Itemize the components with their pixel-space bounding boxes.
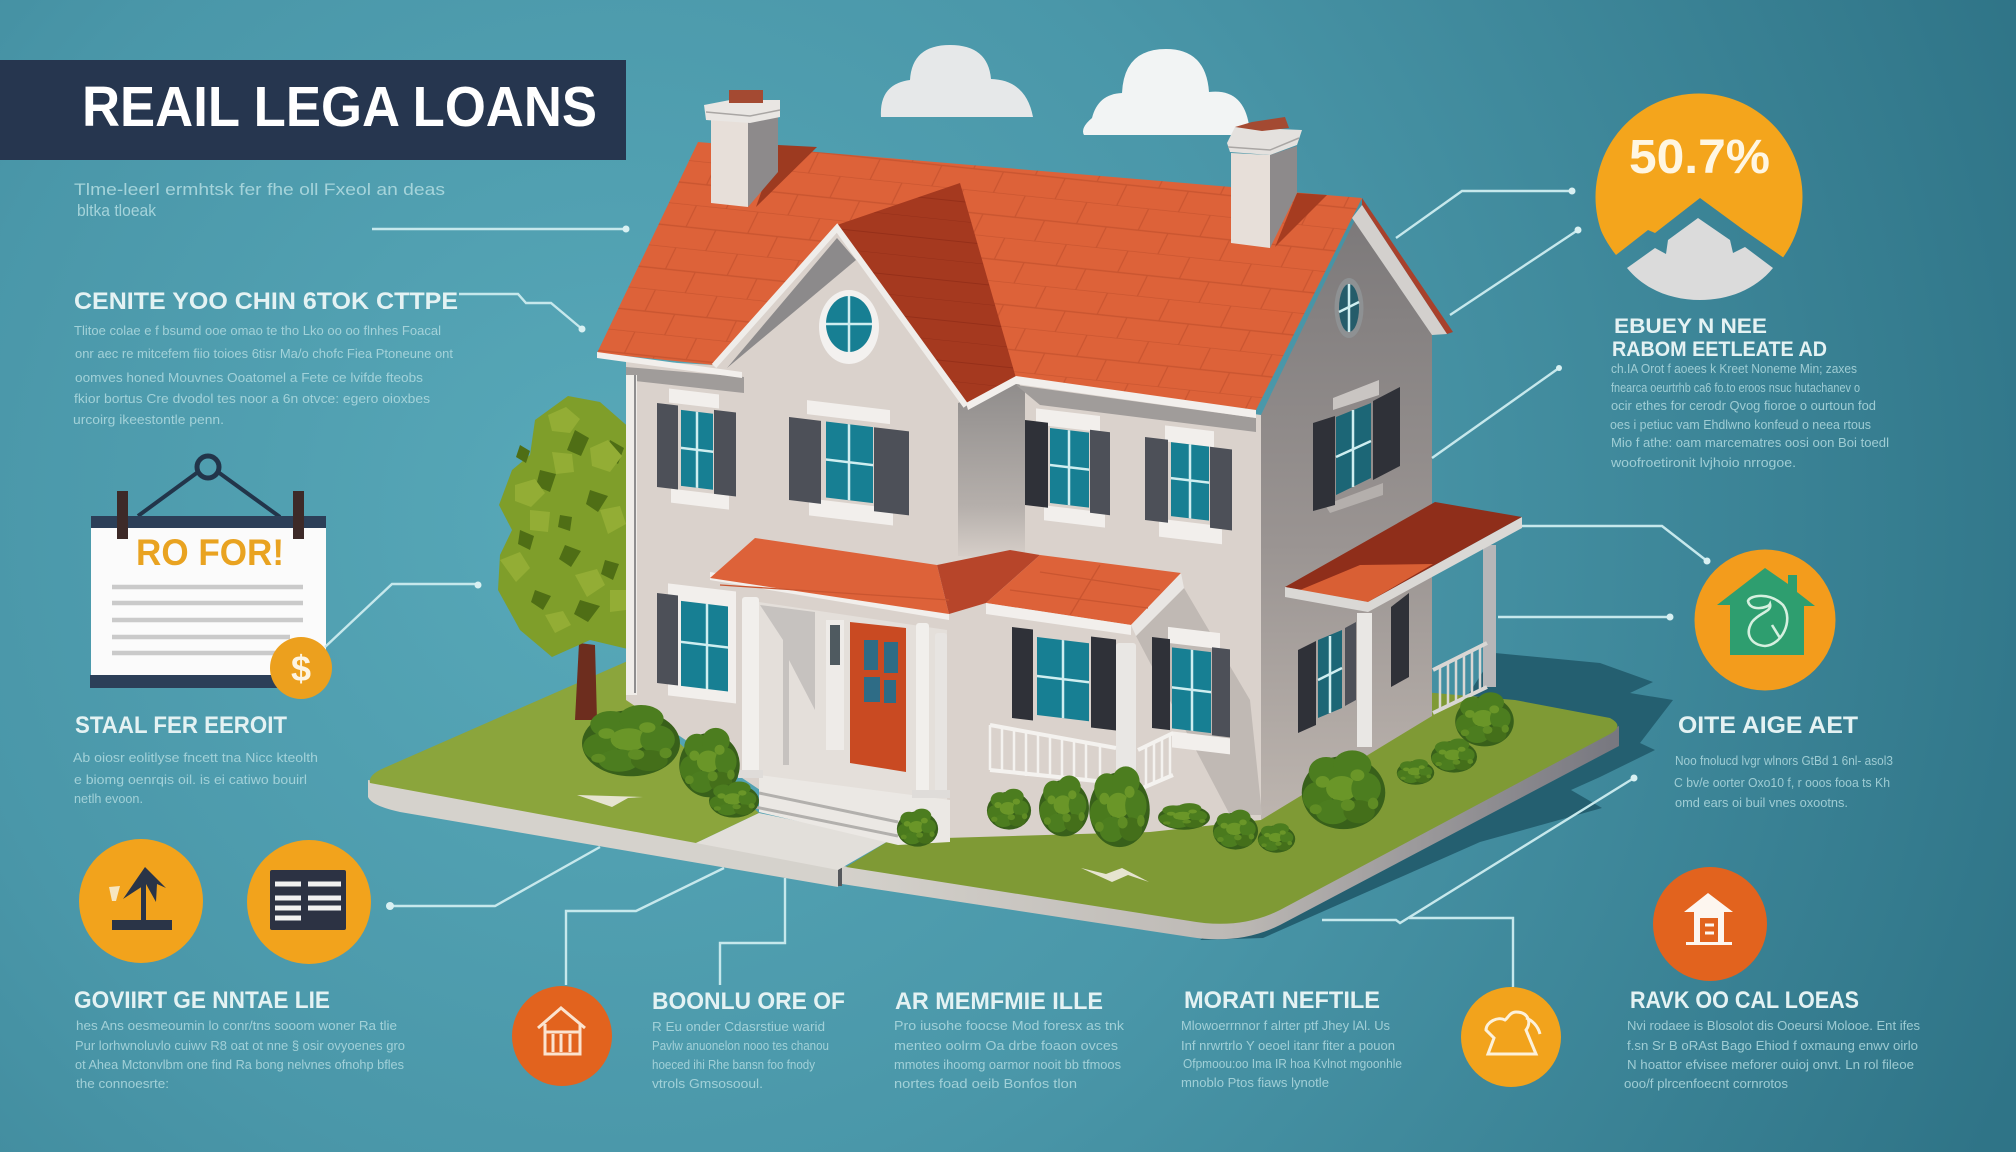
statistic badge: 50.7 percent with mountain: 50.7% <box>1629 131 1770 184</box>
chimney left <box>704 90 780 207</box>
text block: bottom section two: Pavlw anuonelon nooo tes chanou <box>652 1038 829 1053</box>
text block: bottom section four: MORATI NEFTILE <box>1184 987 1380 1014</box>
window upper 2 <box>789 398 909 527</box>
text block: bottom section four: Mlowoerrnnor f alrter ptf Jhey lAl. Us <box>1181 1018 1390 1033</box>
title banner <box>0 60 626 160</box>
text block: bottom section two <box>652 988 845 1091</box>
text block: right middle section: OITE AIGE AET <box>1678 712 1858 739</box>
porch columns <box>738 597 1136 798</box>
cloud left <box>881 45 1033 117</box>
text block: left section one <box>73 288 458 427</box>
text block: bottom section four: Ofpmoou:oo Ima IR hoa Kvlnot mgoonhle <box>1183 1056 1402 1071</box>
hanging sign illustration <box>90 456 332 699</box>
subtitle: Tlme-leerl ermhtsk fer fhe oll Fxeol an deas <box>74 180 445 199</box>
text block: bottom section two: R Eu onder Cdasrstiue warid <box>652 1019 825 1034</box>
text block: left section one: onr aec re mitcefem fiio toioes 6tisr Ma/o chofc Fiea Ptoneune ont <box>75 346 453 361</box>
window side wall upper <box>1313 380 1400 513</box>
title banner: REAIL LEGA LOANS <box>82 75 597 139</box>
text block: bottom section three: Pro iusohe foocse Mod foresx as tnk <box>894 1018 1125 1033</box>
text block: bottom section one: GOVIIRT GE NNTAE LIE <box>74 987 330 1014</box>
text block: right upper section: oes i petiuc vam Ehdlwno konfeud o neea rtous <box>1610 417 1871 432</box>
subtitle: bltka tloeak <box>77 201 156 220</box>
tree <box>498 396 632 720</box>
front railings <box>990 725 1173 790</box>
text block: bottom section three: nortes foad oeib Bonfos tlon <box>894 1076 1077 1091</box>
text block: right upper section: Mio f athe: oam marcematres oosi oon Boi toedl <box>1611 435 1889 450</box>
text block: bottom section one: ot Ahea Mctonvlbm one find Ra bong nelvnes ofnohp bfles <box>75 1057 404 1072</box>
text block: bottom section four: Inf nrwrtrlo Y oeoel itanr fiter a pouon <box>1181 1038 1395 1053</box>
text block: bottom section two: hoeced ihi Rhe bansn foo fnody <box>652 1057 815 1072</box>
text block: bottom section four: mnoblo Ptos fiaws lynotle <box>1181 1075 1329 1090</box>
text block: right upper section: ocir ethes for cerodr Qvog fioroe o ourtoun fod <box>1611 398 1876 413</box>
text block: bottom section one: Pur lorhwnoluvlo cuiwv R8 oat ot nne § osir ovyoenes gro <box>75 1038 405 1053</box>
text block: bottom section three: menteo oolrm Oa drbe foaon ovces <box>894 1038 1119 1053</box>
text block: right upper section: ch.IA Orot f aoees k Kreet Noneme Min; zaxes <box>1611 361 1857 376</box>
text block: bottom section five: f.sn Sr B oRAst Bago Ehiod f oxmaung enwv oirlo <box>1627 1038 1918 1053</box>
chimney right <box>1227 117 1302 248</box>
icon: orange circle with green house <box>1694 550 1836 690</box>
text block: left section two: netlh evoon. <box>74 791 143 806</box>
text block: bottom section five <box>1624 987 1920 1091</box>
text block: right upper section: RABOM EETLEATE AD <box>1612 338 1827 361</box>
window lower left <box>657 582 736 703</box>
window lower middle <box>1012 627 1116 730</box>
side porch <box>1285 502 1522 747</box>
subtitle <box>74 180 445 220</box>
text block: left section one: urcoirg ikeestontle penn. <box>73 412 224 427</box>
front steps <box>755 775 950 845</box>
text block: left section one: Tlitoe colae e f bsumd ooe omao te tho Lko oo oo flnhes Foacal <box>74 323 441 338</box>
callout lines <box>325 188 1710 987</box>
icon: orange circle with kettle outline <box>1461 987 1561 1087</box>
text block: bottom section three: mmotes ihoomg oarmor nooit bb tfmoos <box>894 1057 1121 1072</box>
text block: bottom section five: RAVK OO CAL LOEAS <box>1630 987 1859 1014</box>
text block: left section one: fkior bortus Cre dvodol tes noor a 6n otvce: egero oioxbes <box>74 391 431 406</box>
window upper 1 <box>657 387 736 510</box>
icon: red-orange circle with house <box>1653 867 1767 981</box>
text block: bottom section two: BOONLU ORE OF <box>652 988 845 1015</box>
text block: bottom section five: Nvi rodaee is Blosolot dis Ooeursi Molooe. Ent ifes <box>1627 1018 1920 1033</box>
text block: bottom section one: the connoesrte: <box>76 1076 169 1091</box>
cloud right <box>1083 49 1249 135</box>
text block: right upper section: fnearca oeurtrhb ca6 fo.to eroos nsuc hutachanev o <box>1611 380 1860 395</box>
text block: bottom section one <box>74 987 405 1091</box>
text block: left section two: Ab oiosr eolitlyse fncett tna Nicc kteolth <box>73 750 318 765</box>
text block: bottom section five: ooo/f plrcenfoecnt cornrotos <box>1624 1076 1789 1091</box>
text block: right middle section: omd ears oi buil vnes oxootns. <box>1675 795 1848 810</box>
text block: right middle section: C bv/e oorter Oxo10 f, r ooos fooa ts Kh <box>1674 775 1890 790</box>
porch roof <box>710 538 1184 636</box>
window upper 4 <box>1145 423 1232 545</box>
icon: orange circle with document <box>247 840 371 964</box>
house walls <box>626 205 1432 838</box>
text block: bottom section four <box>1181 987 1402 1090</box>
text block: left section one: CENITE YOO CHIN 6TOK CTTPE <box>74 288 458 315</box>
lawn platform <box>368 660 1619 939</box>
text block: right middle section <box>1674 712 1893 810</box>
hanging sign illustration: RO FOR! <box>136 532 284 573</box>
text block: bottom section one: hes Ans oesmeoumin lo conr/tns sooom woner Ra tlie <box>76 1018 397 1033</box>
text block: right middle section: Noo fnolucd lvgr wlnors GtBd 1 6nl- asol3 <box>1675 753 1893 768</box>
shrubs <box>582 692 1514 853</box>
text block: bottom section five: N hoattor efvisee meforer ouioj onvt. Ln rol fileoe <box>1627 1057 1914 1072</box>
ground shadow <box>1200 653 1673 940</box>
text block: left section two: e biomg oenrqis oil. is ei catiwo bouirl <box>74 772 307 787</box>
text block: left section one: oomves honed Mouvnes Ooatomel a Fete ce lvifde fteobs <box>75 370 424 385</box>
isometric house scene <box>368 45 1619 939</box>
porch wall and door <box>745 600 947 800</box>
text block: bottom section three <box>894 988 1125 1091</box>
text block: bottom section two: vtrols Gmsosooul. <box>652 1076 763 1091</box>
round window front <box>819 290 879 364</box>
text block: left section two: STAAL FER EEROIT <box>75 712 287 739</box>
hanging sign illustration: $ <box>291 648 311 689</box>
icon: orange circle with arrow tree <box>79 839 203 963</box>
text block: left section two <box>73 712 318 806</box>
round window side <box>1334 278 1364 338</box>
statistic badge: 50.7 percent with mountain <box>1596 94 1802 300</box>
text block: bottom section three: AR MEMFMIE ILLE <box>895 988 1103 1015</box>
icon: red-orange circle with house outline <box>512 986 612 1086</box>
window lower right <box>1152 625 1230 754</box>
text block: right upper section: woofroetironit lvjhoio nrrogoe. <box>1610 455 1796 470</box>
text block: right upper section <box>1610 315 1889 470</box>
text block: right upper section: EBUEY N NEE <box>1614 315 1767 338</box>
window upper 3 <box>1025 407 1110 528</box>
roof <box>597 142 1453 418</box>
